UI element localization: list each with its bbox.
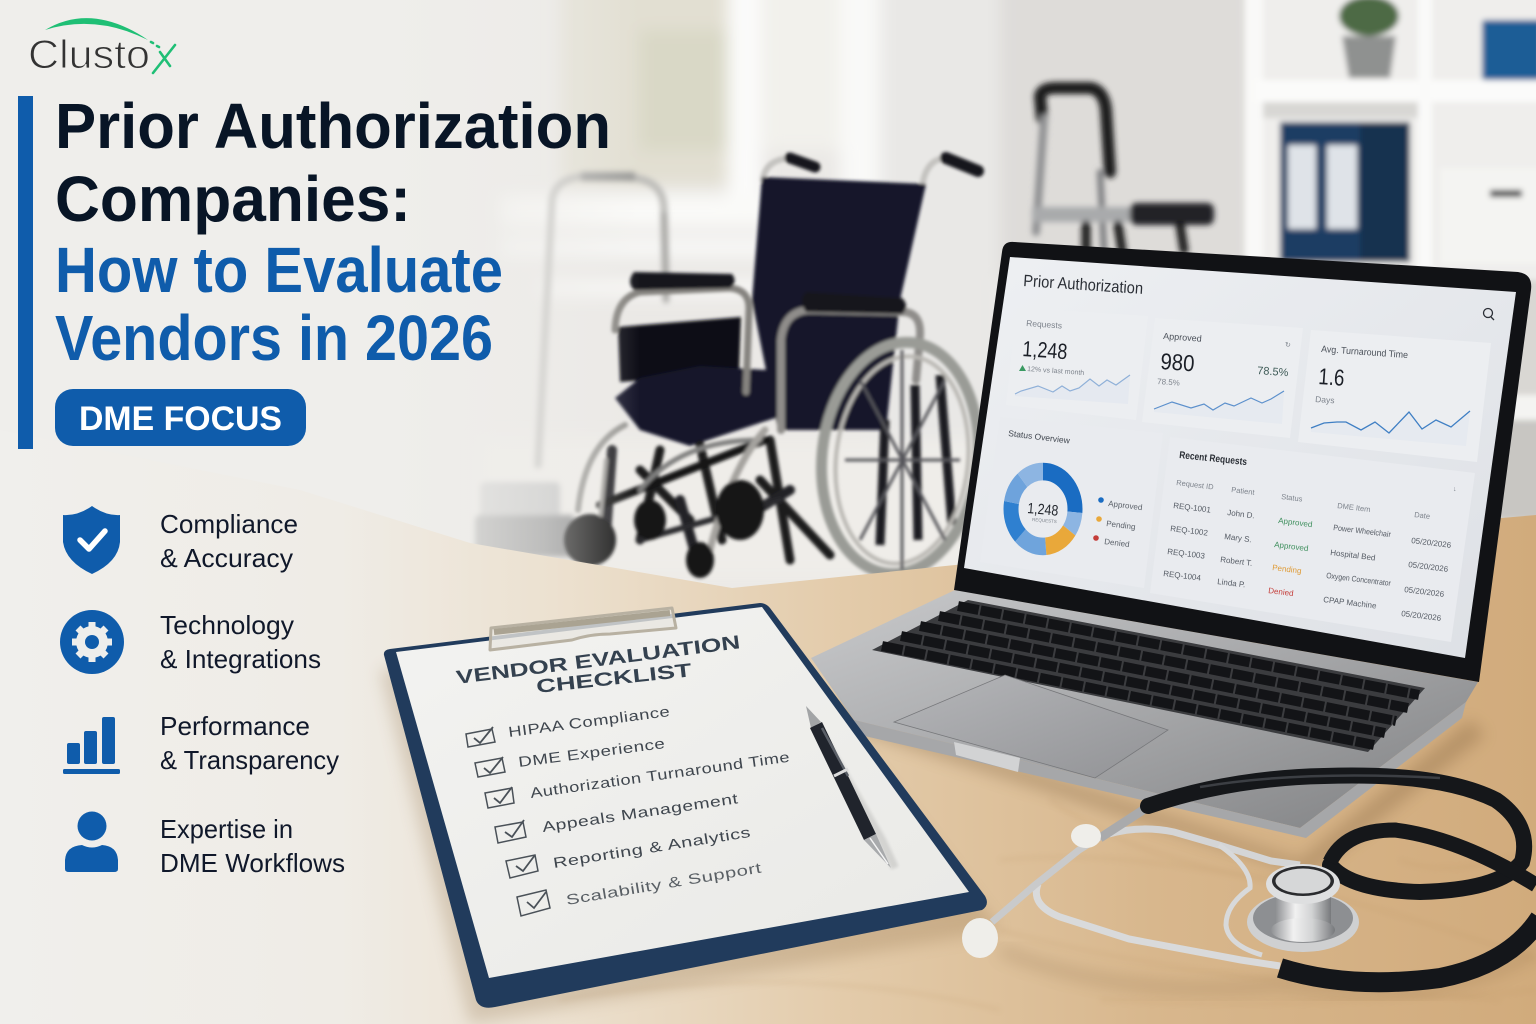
criteria: compliance	[63, 506, 298, 574]
card: recent requests table: Denied	[1268, 586, 1294, 598]
card: approved: 78.5%	[1157, 377, 1180, 388]
casters	[564, 480, 764, 578]
swoosh	[45, 18, 148, 40]
legend	[1093, 497, 1143, 549]
base front edge	[854, 702, 1466, 838]
check items: HIPAA Compliance	[507, 704, 671, 741]
card: recent requests table: REQ-1001	[1173, 501, 1212, 515]
backrest	[752, 177, 926, 430]
room background	[0, 0, 1536, 620]
metal clip	[490, 608, 676, 650]
checklist title: CHECKLIST	[535, 660, 693, 698]
title: Companies:	[55, 163, 411, 235]
card: status overview: REQUESTS	[1032, 517, 1057, 524]
card: recent requests table: Approved	[1278, 516, 1313, 529]
card: recent requests table: 05/20/2026	[1404, 585, 1445, 599]
card: turnaround: Days	[1315, 394, 1335, 405]
card: recent requests table: 05/20/2026	[1408, 560, 1449, 574]
criteria: expertise: Expertise in	[160, 814, 293, 844]
card: requests	[1006, 308, 1148, 420]
check items: Scalability & Support	[565, 860, 763, 909]
card: recent requests table: REQ-1004	[1163, 569, 1202, 583]
criteria: performance	[63, 711, 339, 775]
plant	[1339, 0, 1399, 78]
card: recent requests table	[1150, 437, 1475, 642]
card: recent requests table: Linda P.	[1217, 577, 1246, 589]
card: status overview: Status Overview	[1008, 428, 1071, 446]
check items: DME Experience	[517, 736, 666, 771]
walker background left	[475, 172, 666, 557]
ear tips	[962, 824, 1101, 958]
card: recent requests table: Robert T.	[1220, 555, 1253, 568]
badge: DME focus: DME FOCUS	[79, 400, 282, 438]
card: turnaround: 1.6	[1318, 363, 1345, 391]
title: Vendors in 2026	[55, 302, 493, 374]
icon: shield	[63, 506, 120, 574]
check items: Appeals Management	[541, 791, 739, 836]
clipboard	[380, 603, 1000, 1024]
legend: Approved	[1108, 499, 1143, 512]
legend: Pending	[1106, 519, 1136, 532]
card: requests: Requests	[1026, 318, 1062, 331]
black tube	[1148, 776, 1524, 892]
chest piece	[1247, 864, 1359, 952]
card: requests: 1,248	[1022, 336, 1068, 364]
pen	[806, 706, 895, 868]
logo: Clusto	[28, 33, 150, 77]
search icon	[1484, 308, 1494, 320]
criteria: performance: Performance	[160, 711, 310, 741]
card: recent requests table: REQ-1002	[1170, 524, 1209, 538]
badge: DME focus	[55, 389, 306, 446]
title: How to Evaluate	[55, 234, 503, 306]
keyboard	[872, 600, 1425, 752]
silver tubing	[1036, 884, 1280, 966]
shadow	[1000, 950, 1536, 992]
criteria: technology: & Integrations	[160, 644, 321, 674]
wooden desk	[0, 430, 1536, 1024]
card: recent requests table: Recent Requests	[1179, 450, 1248, 468]
card: recent requests table: Oxygen Concentrator	[1326, 571, 1392, 588]
shadow	[820, 700, 1485, 875]
base	[811, 590, 1478, 828]
checkboxes	[466, 727, 550, 916]
donut chart	[1011, 472, 1075, 546]
side panel	[618, 317, 741, 382]
card: turnaround: Avg. Turnaround Time	[1321, 344, 1408, 361]
lid	[954, 242, 1531, 682]
shadow	[380, 620, 1000, 1024]
card: recent requests table: Approved	[1274, 540, 1309, 553]
card: recent requests table: CPAP Machine	[1323, 595, 1378, 611]
left fade overlay	[0, 0, 640, 640]
under-seat frame clutter	[578, 425, 830, 570]
legend: Denied	[1104, 537, 1130, 549]
binders	[1280, 122, 1410, 262]
card: requests: 12% vs last month	[1027, 366, 1085, 377]
icon: person	[65, 812, 118, 872]
criteria: compliance: Compliance	[160, 509, 298, 539]
title: Prior Authorization	[55, 90, 611, 162]
card: recent requests table: 05/20/2026	[1401, 609, 1442, 623]
paper	[396, 607, 969, 978]
criteria: performance: & Transparency	[160, 745, 339, 775]
icon: gear	[60, 610, 124, 674]
card: recent requests table: Patient	[1231, 485, 1256, 497]
card: recent requests table: ↓	[1453, 486, 1456, 493]
card: recent requests table: Pending	[1272, 563, 1302, 576]
stethoscope	[962, 775, 1536, 992]
logo	[28, 18, 175, 77]
card: status overview	[980, 417, 1163, 588]
shelving unit with binders and plant	[1245, 0, 1536, 520]
screen	[964, 257, 1516, 658]
armrests	[630, 272, 735, 290]
title accent bar	[18, 96, 33, 449]
laptop	[811, 242, 1531, 875]
card: approved: 980	[1160, 348, 1195, 376]
card: recent requests table: Request ID	[1176, 478, 1215, 492]
checklist title	[455, 632, 741, 698]
donut label: 1,248	[1027, 500, 1059, 520]
large wheel	[810, 334, 990, 582]
card: recent requests table: 05/20/2026	[1411, 536, 1452, 550]
criteria: compliance: & Accuracy	[160, 543, 293, 573]
icon: bar chart	[63, 717, 120, 774]
card: recent requests table: Hospital Bed	[1330, 548, 1376, 563]
check items: Authorization Turnaround Time	[529, 750, 791, 802]
card: approved: ↻	[1285, 342, 1291, 349]
check items: Reporting & Analytics	[552, 825, 752, 872]
card: recent requests table: Date	[1414, 510, 1431, 521]
card: approved: Approved	[1163, 331, 1202, 344]
front notch	[954, 742, 1020, 772]
card: recent requests table: John D.	[1227, 508, 1255, 520]
criteria: technology	[60, 610, 321, 674]
criteria: expertise	[65, 812, 345, 878]
card: recent requests table: Power Wheelchair	[1333, 523, 1392, 539]
card: approved	[1142, 318, 1303, 438]
green X	[151, 42, 175, 73]
criteria: technology: Technology	[160, 610, 294, 640]
seat	[615, 366, 800, 446]
wheelchair	[564, 158, 990, 582]
card: recent requests table: REQ-1003	[1167, 547, 1206, 561]
card: recent requests table: Status	[1281, 492, 1303, 504]
card: turnaround	[1298, 330, 1491, 462]
rollator walker background right	[1032, 88, 1214, 250]
blue box	[1482, 20, 1536, 80]
trackpad	[894, 675, 1168, 778]
title	[55, 90, 611, 374]
screen title: Prior Authorization	[1023, 272, 1144, 298]
frame	[615, 288, 920, 430]
card: recent requests table: Mary S.	[1224, 532, 1252, 544]
card: recent requests table: DME Item	[1337, 501, 1371, 514]
check items	[507, 704, 791, 909]
push handles	[763, 158, 978, 188]
board	[384, 603, 987, 1008]
checklist title: VENDOR EVALUATION	[455, 632, 741, 689]
white storage box	[1440, 168, 1536, 264]
card: approved: 78.5%	[1257, 365, 1289, 379]
criteria: expertise: DME Workflows	[160, 848, 345, 878]
